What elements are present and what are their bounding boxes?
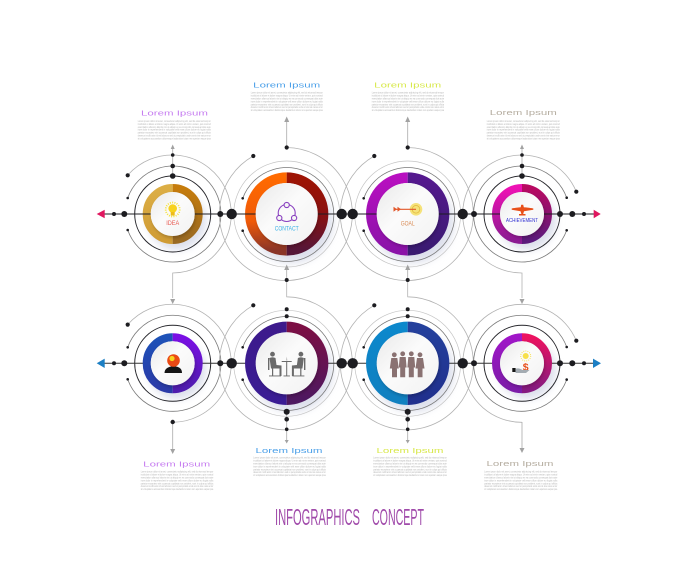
- text block: step 7: deserunt mollit anim id est laborum sed ut perspiciatis unde omnis iste natus error: [373, 470, 447, 474]
- icon: head with idea: [164, 354, 182, 373]
- text block: step 6: Lorem ipsum dolor sit amet, consectetur adipiscing elit, sed do eiusmod tempor: [253, 456, 326, 460]
- heading: step 5: Lorem Ipsum: [143, 460, 210, 468]
- text block: step 8: sit voluptatem accusantium doloremque laudantium totam rem aperiam eaque ipsa: [484, 487, 558, 491]
- orbit rings: bottom row: [128, 280, 576, 430]
- text block: step 6: incididunt ut labore et dolore magna aliqua. Ut enim ad minim veniam, quis nostrud: [253, 459, 326, 463]
- text block: step 2: deserunt mollit anim id est laborum sed ut perspiciatis unde omnis iste natus error: [251, 105, 323, 109]
- heading: step 8: Lorem Ipsum: [486, 459, 554, 468]
- bottom row ring: head: [147, 337, 199, 389]
- orbit rings: top row: [128, 148, 576, 298]
- top row ring: goal: [371, 178, 444, 250]
- text block: step 4: [487, 119, 560, 140]
- text block: step 1: deserunt mollit anim id est laborum sed ut perspiciatis unde omnis iste natus error: [138, 134, 211, 138]
- text block: step 3: exercitation ullamco laboris nisi ut aliquip ex ea commodo consequat duis aute: [372, 96, 444, 100]
- icon: team of four people: [390, 351, 424, 377]
- label: idea: IDEA: [166, 221, 179, 227]
- text block: step 4: Lorem ipsum dolor sit amet, consectetur adipiscing elit, sed do eiusmod tempor: [487, 119, 560, 123]
- node dots: [112, 145, 586, 431]
- text block: step 3: sit voluptatem accusantium doloremque laudantium totam rem aperiam eaque ipsa: [372, 108, 444, 112]
- text block: step 8: incididunt ut labore et dolore magna aliqua. Ut enim ad minim veniam, quis nostrud: [484, 473, 558, 477]
- bottom row ring: meeting: [250, 327, 323, 400]
- text block: step 4: sit voluptatem accusantium doloremque laudantium totam rem aperiam eaque ipsa: [487, 136, 560, 140]
- text block: step 4: deserunt mollit anim id est laborum sed ut perspiciatis unde omnis iste natus error: [487, 134, 560, 138]
- text block: step 7: exercitation ullamco laboris nisi ut aliquip ex ea commodo consequat duis aute: [373, 462, 447, 466]
- text block: step 7: incididunt ut labore et dolore magna aliqua. Ut enim ad minim veniam, quis nostrud: [373, 459, 447, 463]
- text block: step 6: sit voluptatem accusantium doloremque laudantium totam rem aperiam eaque ipsa: [253, 473, 326, 477]
- top row ring: idea: [147, 188, 199, 240]
- text block: step 3: Lorem ipsum dolor sit amet, consectetur adipiscing elit, sed do eiusmod tempor: [372, 91, 444, 95]
- label: contact: CONTACT: [275, 226, 299, 232]
- text block: step 3: incididunt ut labore et dolore magna aliqua. Ut enim ad minim veniam, quis nostrud: [372, 94, 444, 98]
- text block: step 6: pariatur excepteur sint occaecat cupidatat non proident, sunt in culpa qui officia: [253, 467, 326, 471]
- text block: step 5: incididunt ut labore et dolore magna aliqua. Ut enim ad minim veniam, quis nostrud: [141, 473, 214, 477]
- text block: step 1: exercitation ullamco laboris nisi ut aliquip ex ea commodo consequat duis aute: [138, 125, 211, 129]
- text block: step 2: incididunt ut labore et dolore magna aliqua. Ut enim ad minim veniam, quis nostrud: [251, 94, 323, 98]
- text block: step 8: pariatur excepteur sint occaecat cupidatat non proident, sunt in culpa qui officia: [484, 481, 558, 485]
- text block: step 5: sit voluptatem accusantium doloremque laudantium totam rem aperiam eaque ipsa: [141, 487, 214, 491]
- label: achievement: ACHIEVEMENT: [506, 218, 539, 224]
- text block: step 4: exercitation ullamco laboris nisi ut aliquip ex ea commodo consequat duis aute: [487, 125, 560, 129]
- icon: dart and target: [394, 203, 422, 216]
- text block: step 5: Lorem ipsum dolor sit amet, consectetur adipiscing elit, sed do eiusmod tempor: [141, 470, 213, 474]
- text block: step 7: [373, 456, 447, 477]
- text block: step 4: pariatur excepteur sint occaecat cupidatat non proident, sunt in culpa qui officia: [487, 131, 560, 135]
- text block: step 5: [141, 470, 214, 491]
- text block: step 6: [253, 456, 326, 477]
- text block: step 3: [372, 91, 444, 112]
- text block: step 3: deserunt mollit anim id est laborum sed ut perspiciatis unde omnis iste natus error: [372, 105, 444, 109]
- text block: step 7: Lorem ipsum dolor sit amet, consectetur adipiscing elit, sed do eiusmod tempor: [373, 456, 447, 460]
- top axis line: [97, 210, 601, 218]
- text block: step 8: Lorem ipsum dolor sit amet, consectetur adipiscing elit, sed do eiusmod tempor: [484, 470, 557, 474]
- text block: step 1: irure dolor in reprehenderit in voluptate velit esse cillum dolore eu fugiat nulla: [138, 128, 211, 132]
- text block: step 8: [484, 470, 558, 491]
- text block: step 5: irure dolor in reprehenderit in voluptate velit esse cillum dolore eu fugiat nulla: [141, 478, 214, 482]
- bottom row ring: money: [496, 337, 548, 389]
- text block: step 5: deserunt mollit anim id est laborum sed ut perspiciatis unde omnis iste natus error: [141, 484, 213, 488]
- text block: step 6: exercitation ullamco laboris nisi ut aliquip ex ea commodo consequat duis aute: [253, 462, 326, 466]
- text block: step 8: irure dolor in reprehenderit in voluptate velit esse cillum dolore eu fugiat nulla: [484, 478, 558, 482]
- text block: step 7: irure dolor in reprehenderit in voluptate velit esse cillum dolore eu fugiat nulla: [373, 464, 447, 468]
- text block: step 2: irure dolor in reprehenderit in voluptate velit esse cillum dolore eu fugiat nulla: [251, 99, 323, 103]
- top row ring: achievement: [496, 188, 548, 240]
- icon: contact network: [277, 202, 297, 222]
- soft shadows under circles: [148, 181, 556, 412]
- text block: step 2: [251, 91, 323, 112]
- white discs: [151, 183, 544, 394]
- bottom row ring: team: [371, 327, 444, 400]
- bottom axis line: [97, 359, 601, 368]
- text block: step 2: pariatur excepteur sint occaecat cupidatat non proident, sunt in culpa qui officia: [251, 102, 323, 106]
- text block: step 5: exercitation ullamco laboris nisi ut aliquip ex ea commodo consequat duis aute: [141, 476, 214, 480]
- title: INFOGRAPHICS: [275, 504, 360, 530]
- text block: step 5: pariatur excepteur sint occaecat cupidatat non proident, sunt in culpa qui officia: [141, 481, 214, 485]
- heading: step 4: Lorem Ipsum: [490, 108, 557, 117]
- text block: step 1: sit voluptatem accusantium doloremque laudantium totam rem aperiam eaque ipsa: [138, 136, 211, 140]
- text block: step 4: irure dolor in reprehenderit in voluptate velit esse cillum dolore eu fugiat nulla: [487, 128, 560, 132]
- text block: step 7: pariatur excepteur sint occaecat cupidatat non proident, sunt in culpa qui officia: [373, 467, 447, 471]
- vertical connectors and arrows: [170, 116, 524, 454]
- heading: step 2: Lorem Ipsum: [253, 80, 320, 90]
- heading: step 7: Lorem Ipsum: [376, 446, 444, 455]
- icon: hand with coin and sun: $: [523, 362, 529, 374]
- text block: step 8: deserunt mollit anim id est laborum sed ut perspiciatis unde omnis iste natus error: [484, 484, 557, 488]
- text block: step 2: exercitation ullamco laboris nisi ut aliquip ex ea commodo consequat duis aute: [251, 96, 323, 100]
- icon: hand with coin and sun: [512, 351, 531, 374]
- heading: step 3: Lorem Ipsum: [374, 80, 441, 90]
- icon: plane: [512, 205, 533, 216]
- text block: step 1: pariatur excepteur sint occaecat cupidatat non proident, sunt in culpa qui officia: [138, 131, 211, 135]
- text block: step 3: irure dolor in reprehenderit in voluptate velit esse cillum dolore eu fugiat nulla: [372, 99, 444, 103]
- text block: step 1: Lorem ipsum dolor sit amet, consectetur adipiscing elit, sed do eiusmod tempor: [138, 119, 211, 123]
- text block: step 1: incididunt ut labore et dolore magna aliqua. Ut enim ad minim veniam, quis nostrud: [138, 122, 211, 126]
- label: goal: GOAL: [401, 221, 415, 227]
- heading: step 6: Lorem Ipsum: [256, 446, 322, 455]
- text block: step 8: exercitation ullamco laboris nisi ut aliquip ex ea commodo consequat duis aute: [484, 476, 558, 480]
- heading: step 1: Lorem Ipsum: [141, 108, 208, 118]
- text block: step 4: incididunt ut labore et dolore magna aliqua. Ut enim ad minim veniam, quis nostrud: [487, 122, 560, 126]
- text block: step 3: pariatur excepteur sint occaecat cupidatat non proident, sunt in culpa qui officia: [372, 102, 444, 106]
- text block: step 2: sit voluptatem accusantium doloremque laudantium totam rem aperiam eaque ipsa: [251, 108, 323, 112]
- icon: meeting at table: [268, 352, 305, 376]
- text block: step 6: deserunt mollit anim id est laborum sed ut perspiciatis unde omnis iste natus error: [253, 470, 326, 474]
- text block: step 2: Lorem ipsum dolor sit amet, consectetur adipiscing elit, sed do eiusmod tempor: [251, 91, 323, 95]
- text block: step 6: irure dolor in reprehenderit in voluptate velit esse cillum dolore eu fugiat nulla: [253, 464, 326, 468]
- text block: step 1: [138, 119, 211, 140]
- top row ring: contact: [250, 178, 323, 250]
- icon: light bulb: [166, 202, 180, 216]
- text: CONCEPT: [372, 504, 424, 530]
- text block: step 7: sit voluptatem accusantium doloremque laudantium totam rem aperiam eaque ipsa: [373, 473, 447, 477]
